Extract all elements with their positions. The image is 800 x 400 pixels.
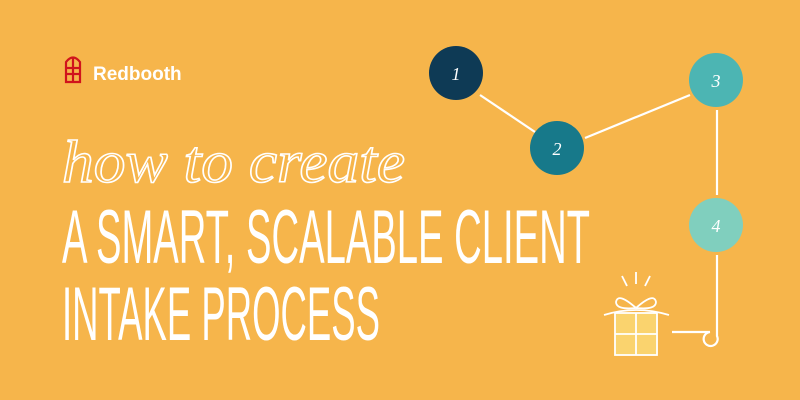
logo: Redbooth: Redbooth	[93, 64, 182, 85]
step 4	[689, 198, 743, 252]
step 3	[689, 53, 743, 107]
connector lines	[480, 95, 718, 346]
icon: gift	[604, 272, 669, 355]
script heading: how to create: how to create	[62, 129, 405, 195]
icon: booth	[66, 58, 80, 82]
step 2	[530, 121, 584, 175]
title: INTAKE PROCESS	[62, 272, 380, 357]
step 2: 2	[552, 139, 562, 159]
step 1: 1	[452, 64, 460, 84]
title	[62, 195, 590, 357]
step 3: 3	[710, 71, 720, 91]
logo: Redbooth	[66, 58, 182, 85]
step 1	[429, 46, 483, 100]
step 4: 4	[712, 216, 720, 236]
